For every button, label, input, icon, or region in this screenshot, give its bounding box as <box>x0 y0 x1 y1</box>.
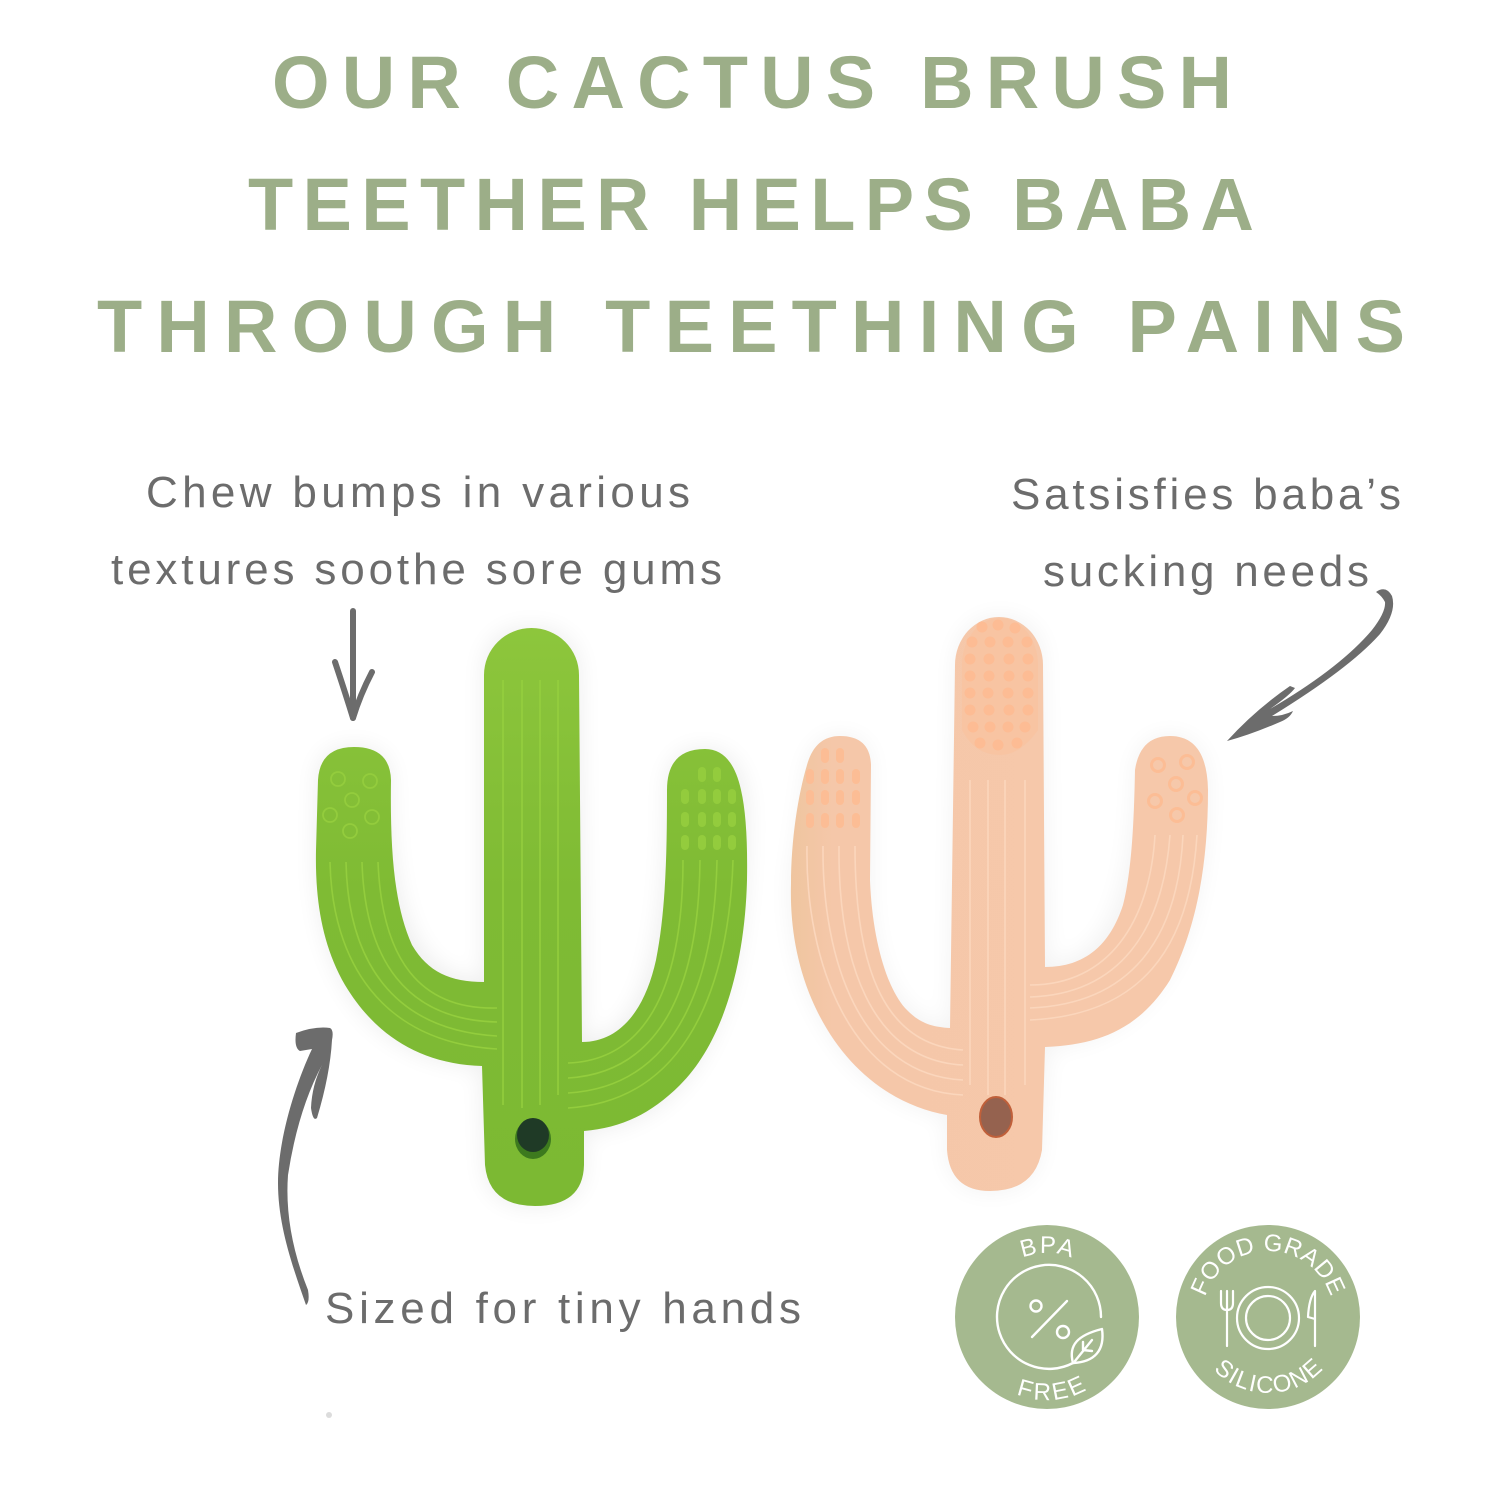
arrow: curved to peach cactus <box>1227 589 1393 741</box>
callout: sucking needs: Satsisfies baba’s <box>1011 470 1401 519</box>
callout: sucking needs: sucking needs <box>1043 547 1369 596</box>
green cactus teether <box>316 628 747 1206</box>
badge text: BPA <box>1020 1236 1072 1258</box>
arrow: curved up to green cactus <box>278 1028 333 1305</box>
icon: percent in circle with leaf <box>997 1265 1103 1369</box>
ring bumps <box>1148 756 1202 822</box>
bar bumps <box>681 767 736 850</box>
hole <box>515 1118 551 1159</box>
callout: tiny hands: Sized for tiny hands <box>325 1284 801 1333</box>
title <box>97 41 1405 368</box>
icon: plate, fork and knife <box>1221 1287 1315 1349</box>
hole <box>980 1097 1012 1137</box>
callout: chew bumps: textures soothe sore gums <box>111 545 722 594</box>
title: TEETHER HELPS BABA <box>248 163 1254 246</box>
badge text <box>1190 1234 1346 1393</box>
callout: sucking needs <box>1011 470 1401 596</box>
title: OUR CACTUS BRUSH <box>272 41 1232 124</box>
bar bumps <box>806 748 860 828</box>
badge text: FREE <box>1018 1376 1086 1400</box>
callout: chew bumps <box>111 468 722 594</box>
peach cactus teether <box>790 617 1208 1191</box>
badge text: SILICONE <box>1216 1358 1322 1393</box>
arrow: down to green arm <box>335 611 372 718</box>
badge text <box>1018 1236 1086 1400</box>
speck <box>326 1412 332 1418</box>
badge: BPA free <box>955 1225 1139 1409</box>
badge: food grade silicone <box>1176 1225 1360 1409</box>
callout: chew bumps: Chew bumps in various <box>146 468 690 517</box>
title: THROUGH TEETHING PAINS <box>97 285 1405 368</box>
ribs <box>330 680 733 1108</box>
ribs <box>807 780 1197 1095</box>
ring bumps <box>323 772 379 838</box>
brush head <box>962 618 1038 755</box>
badge text: FOOD GRADE <box>1190 1234 1346 1296</box>
